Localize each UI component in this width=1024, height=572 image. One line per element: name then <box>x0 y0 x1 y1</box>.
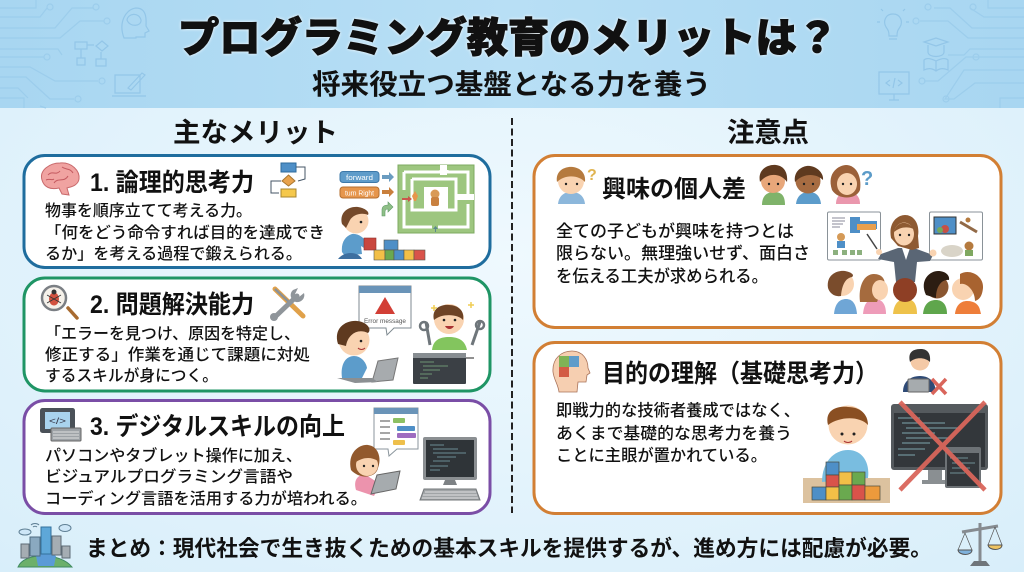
error window <box>359 286 411 335</box>
child with wrenches <box>420 302 484 350</box>
body text: logical thinking: 「何をどう命令すれば目的を達成でき <box>45 224 325 242</box>
panel: individual interest <box>534 156 1001 328</box>
heading: main merits: 主なメリット <box>173 118 338 148</box>
title: プログラミング教育のメリットは？ <box>178 15 838 61</box>
body text: purpose understanding <box>556 401 800 465</box>
icon: city on globe <box>18 524 72 567</box>
panel: logical thinking <box>24 156 490 268</box>
body text: purpose understanding: 即戦力的な技術者養成ではなく、 <box>556 401 800 420</box>
students <box>828 271 983 314</box>
code window <box>413 353 474 384</box>
icon: tablet and keyboard <box>40 408 81 441</box>
icon: curious boy: ? <box>587 167 597 184</box>
body text: digital skills <box>45 446 367 508</box>
girl with tablet <box>350 445 400 496</box>
icons: three children <box>760 165 873 205</box>
circuit decoration right <box>877 0 1024 108</box>
body text: individual interest <box>556 221 810 286</box>
icon: head with puzzle <box>553 351 590 392</box>
heading: purpose understanding: 目的の理解（基礎思考力） <box>602 360 878 388</box>
illustration: child solving a maze <box>338 165 474 260</box>
body text: logical thinking: るか」を考える過程で鍛えられる。 <box>45 245 302 263</box>
desktop computer <box>420 437 480 500</box>
forward command: forward <box>346 173 373 182</box>
heading: individual interest: 興味の個人差 <box>602 176 746 203</box>
body text: digital skills: パソコンやタブレット操作に加え、 <box>45 446 302 465</box>
slide left <box>828 212 880 260</box>
heading: problem solving: 2. 問題解決能力 <box>90 291 254 319</box>
icon: engineer crossed out <box>903 349 946 394</box>
subtitle: 将来役立つ基盤となる力を養う <box>312 69 711 100</box>
icon: tablet and keyboard: </> <box>49 416 66 426</box>
illustration: crossed out code screens <box>891 402 988 490</box>
coloured blocks <box>812 462 880 500</box>
error window: Error message <box>364 319 407 325</box>
heading: cautions: 注意点 <box>727 118 809 148</box>
icon: wrench and screwdriver <box>270 288 304 321</box>
icon: magnifier with bug <box>42 286 77 318</box>
body text: problem solving <box>45 325 310 385</box>
body text: problem solving: 「エラーを見つけ、原因を特定し、 <box>45 325 300 343</box>
panel: digital skills <box>24 400 490 514</box>
body text: purpose understanding: あくまで基礎的な思考力を養う <box>556 424 792 443</box>
header band <box>0 0 1024 108</box>
slide right <box>930 212 982 260</box>
maze <box>398 165 474 233</box>
body text: logical thinking <box>45 202 325 263</box>
center dashed divider <box>511 118 513 513</box>
turn right command: turn Right <box>345 190 374 198</box>
icons: three children: ? <box>861 168 873 190</box>
heading: digital skills: 3. デジタルスキルの向上 <box>90 412 345 441</box>
body text: individual interest: 全ての子どもが興味を持つとは <box>556 221 794 241</box>
blocks <box>374 240 425 260</box>
body text: logical thinking: 物事を順序立てて考える力。 <box>45 202 252 220</box>
illustration: teacher and students <box>828 212 983 314</box>
illustration: child with blocks <box>803 406 890 503</box>
illustration: error message and children fixing code <box>337 286 484 384</box>
icon: flowchart <box>271 163 305 197</box>
illustration: child with tablet and computer <box>350 408 480 500</box>
circuit decoration left <box>0 0 149 108</box>
visual programming window <box>374 408 418 456</box>
body text: purpose understanding: ことに主眼が置かれている。 <box>556 445 767 465</box>
panel: problem solving <box>24 278 490 391</box>
body text: digital skills: コーディング言語を活用する力が培われる。 <box>45 489 367 508</box>
body text: problem solving: するスキルが身につく。 <box>45 366 218 385</box>
summary text: まとめ：現代社会で生き抜くための基本スキルを提供するが、進め方には配慮が必要。 <box>86 536 932 561</box>
heading: logical thinking: 1. 論理的思考力 <box>90 169 254 197</box>
icon: curious boy <box>557 167 597 204</box>
body text: digital skills: ビジュアルプログラミング言語や <box>45 468 293 486</box>
child with laptop <box>337 321 398 383</box>
body text: individual interest: 限らない。無理強いせず、面白さ <box>556 244 810 263</box>
panel: purpose understanding <box>534 342 1001 514</box>
teacher <box>867 215 936 282</box>
icon: balance scale <box>958 523 1002 566</box>
icon: brain <box>41 163 79 195</box>
body text: problem solving: 修正する」作業を通じて課題に対処 <box>45 346 310 364</box>
body text: individual interest: を伝える工夫が求められる。 <box>556 266 768 286</box>
child <box>338 207 376 259</box>
